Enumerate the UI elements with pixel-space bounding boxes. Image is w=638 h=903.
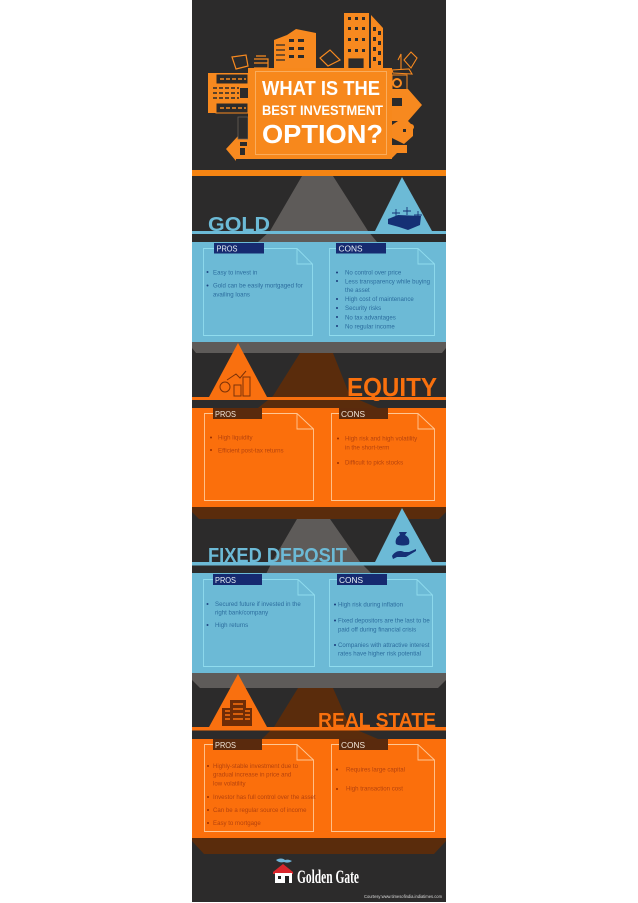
equity cons card [332, 408, 434, 500]
fixed deposit cons card: High risk during inflation [338, 601, 403, 608]
gold cons card: High cost of maintenance [345, 296, 414, 303]
fixed deposit pros card: right bank/company [215, 610, 269, 617]
equity cons card: CONS [341, 410, 366, 419]
icon: real state triangle with buildings [209, 674, 267, 727]
fixed deposit cons card: paid off during financial crisis [338, 626, 416, 633]
equity pros card [204, 408, 314, 500]
heading: gold: GOLD [208, 214, 270, 236]
equity cons card: Difficult to pick stocks [345, 460, 403, 467]
fixed deposit content block [192, 573, 446, 673]
heading: real state: REAL STATE [318, 709, 436, 732]
fixed deposit cons card: rates have higher risk potential [338, 651, 421, 658]
real state cons card: Requires large capital [346, 766, 405, 773]
equity pros card: Efficient post-tax returns [218, 448, 284, 455]
real state content block [192, 739, 446, 838]
real state pros card: Investor has full control over the asset [213, 794, 316, 801]
fixed deposit pros card: High returns [215, 622, 248, 629]
gold cons card: No tax advantages [345, 314, 396, 321]
courtesy credit: Courtesy:www.timesofindia.indiatimes.com [364, 894, 442, 899]
icon: right side investment symbols [392, 52, 422, 158]
header illustration and title [208, 13, 422, 161]
real state cons card [332, 739, 434, 832]
title box [248, 68, 392, 159]
header divider bar [192, 170, 446, 176]
equity cons card: in the short-term [345, 444, 389, 451]
logo: Golden Gate [273, 858, 359, 888]
fixed deposit pros card: Secured future if invested in the [215, 601, 301, 608]
real state pros card: Highly-stable investment due to [213, 763, 299, 770]
fixed deposit cons card [330, 574, 432, 666]
icon: logo house [273, 858, 293, 883]
heading: fixed deposit: FIXED DEPOSIT [208, 544, 347, 567]
equity pros card: PROS [215, 410, 236, 419]
footer trapezoid band [192, 838, 446, 854]
gold cons card: the asset [345, 287, 370, 294]
gold pros card: PROS [216, 244, 238, 254]
gold cons card: Security risks [345, 305, 381, 312]
title text: OPTION? [262, 121, 383, 149]
equity pros card: High liquidity [218, 435, 254, 442]
icon: gold triangle with bars [375, 177, 432, 231]
equity content block [192, 408, 446, 507]
real state pros card [204, 739, 316, 832]
real state pros card: gradual increase in price and [213, 772, 291, 779]
fixed deposit cons card: CONS [339, 576, 364, 585]
gold cons card [330, 243, 434, 336]
gold cons card: CONS [338, 244, 363, 254]
real state cons card: High transaction cost [346, 786, 403, 793]
icon: equity triangle with chart [209, 343, 267, 397]
gold content block [192, 242, 446, 342]
icon: lower left house and arrow [226, 117, 248, 161]
icon: left office building [208, 73, 248, 113]
real state pros card: Easy to mortgage [213, 820, 261, 827]
gold pros card: availing loans [213, 291, 250, 298]
infographic background [192, 0, 446, 902]
fixed deposit cons card: Fixed depositors are the last to be [338, 618, 430, 625]
heading: equity: EQUITY [347, 372, 437, 402]
panel: equity [192, 342, 446, 507]
gold cons card: No regular income [345, 323, 395, 330]
icon: fixed deposit triangle with money bag and hand [375, 508, 432, 562]
fixed deposit pros card: PROS [215, 576, 236, 585]
equity cons card: High risk and high volatility [345, 436, 418, 443]
real state pros card: PROS [215, 741, 236, 750]
gold pros card: Gold can be easily mortgaged for [213, 283, 303, 290]
gold pros card: Easy to invest in [213, 269, 257, 276]
real state pros card: Can be a regular source of income [213, 807, 307, 814]
icon: city skyline [232, 13, 383, 69]
panel: real state [192, 673, 446, 838]
panel: gold [192, 176, 446, 342]
logo wordmark: Golden Gate [297, 867, 359, 888]
title text: WHAT IS THE [262, 77, 380, 100]
title text [262, 77, 384, 149]
fixed deposit cons card: Companies with attractive interest [338, 642, 430, 649]
panel: fixed deposit [192, 507, 446, 673]
real state pros card: low volatility [213, 780, 246, 787]
gold cons card: Less transparency while buying [345, 278, 430, 285]
real state cons card: CONS [341, 741, 366, 750]
gold pros card [204, 243, 312, 336]
title text: BEST INVESTMENT [262, 103, 384, 118]
gold cons card: No control over price [345, 269, 402, 276]
fixed deposit pros card [204, 574, 314, 666]
